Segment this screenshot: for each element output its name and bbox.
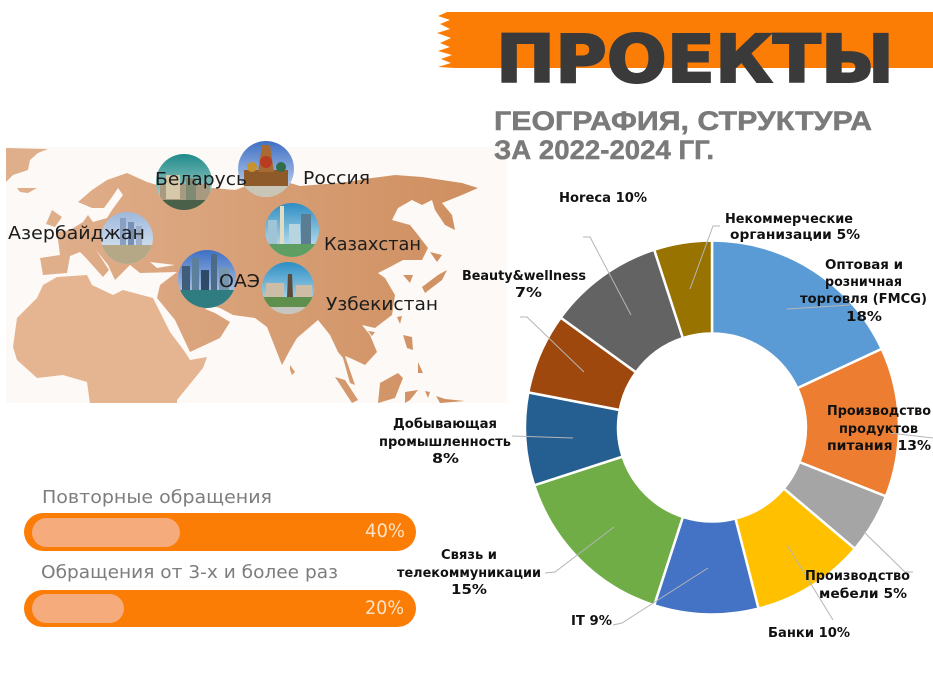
label: Beauty: Beauty&wellness <box>462 269 586 284</box>
segment: telecom 15% <box>534 457 683 605</box>
label: mining: промышленность <box>379 435 511 450</box>
map label: Азербайджан: Азербайджан <box>8 223 145 244</box>
label: banks: Банки 10% <box>768 626 850 641</box>
label: food production: продуктов <box>839 422 918 437</box>
photo: Kazakhstan <box>265 203 319 257</box>
map label: ОАЭ: ОАЭ <box>219 271 260 292</box>
label: food production: питания 13% <box>827 439 931 454</box>
photo: Uzbekistan <box>262 262 314 314</box>
segment: FMCG 18% <box>712 240 882 388</box>
segment: non-profit 5% <box>654 240 712 338</box>
progress bar: 3+ requests 20%: 20% <box>365 597 404 619</box>
label: FMCG: розничная <box>825 275 902 290</box>
label: mining <box>379 417 511 467</box>
photo: Belarus <box>156 154 212 210</box>
segment: furniture 5% <box>784 462 886 549</box>
segment: food production 13% <box>797 349 899 496</box>
segment: horeca 10% <box>561 250 683 372</box>
label: FMCG: торговля (FMCG) <box>800 292 927 307</box>
label: furniture <box>805 569 910 602</box>
label: furniture: мебели 5% <box>819 587 907 602</box>
segment: banks 10% <box>735 489 855 609</box>
progress bar: 3+ requests 20% <box>24 590 416 627</box>
label: mining: 8% <box>432 452 459 467</box>
subtitle <box>494 106 872 165</box>
photo: Azerbaijan <box>101 212 153 264</box>
map of Eurasia and Africa <box>6 147 507 404</box>
photo: Russia <box>238 141 294 197</box>
title: ПРОЕКТЫ <box>496 21 894 98</box>
map label: Узбекистан: Узбекистан <box>326 294 438 315</box>
label: IT: IT 9% <box>571 614 612 629</box>
label: telecom: Связь и <box>441 548 497 563</box>
title band <box>437 12 933 68</box>
label: furniture: Производство <box>805 569 910 584</box>
label: FMCG <box>800 258 927 325</box>
segment: beauty 7% <box>528 318 636 410</box>
map label: Россия: Россия <box>303 168 370 189</box>
label: FMCG: 18% <box>846 310 882 325</box>
leader lines <box>512 226 933 625</box>
label: food production <box>827 404 931 454</box>
label: non-profit: организации 5% <box>730 228 860 243</box>
subtitle: ГЕОГРАФИЯ, СТРУКТУРА <box>494 106 872 136</box>
label: telecom: телекоммуникации <box>397 566 541 581</box>
subtitle: ЗА 2022-2024 ГГ. <box>494 135 714 165</box>
map label: Казахстан: Казахстан <box>324 234 421 255</box>
label: mining: Добывающая <box>393 417 497 432</box>
progress bar: repeat requests 40%: 40% <box>365 520 405 542</box>
label: food production: Производство <box>827 404 931 419</box>
label: repeat requests: Повторные обращения <box>42 488 272 508</box>
label: Beauty <box>462 269 586 301</box>
photo: UAE <box>178 250 236 308</box>
label: Horeca: Horeca 10% <box>559 191 647 206</box>
label: Beauty: 7% <box>515 286 542 301</box>
donut chart <box>525 240 899 614</box>
label: FMCG: Оптовая и <box>825 258 903 273</box>
map label: Беларусь: Беларусь <box>155 169 247 190</box>
segment: IT 9% <box>654 517 758 614</box>
label: telecom: 15% <box>451 583 487 598</box>
label: non-profit: Некоммерческие <box>725 212 853 227</box>
label: telecom <box>397 548 541 598</box>
segment: mining 8% <box>525 392 623 485</box>
progress bar: repeat requests 40% <box>24 513 416 551</box>
label: 3+ requests: Обращения от 3-х и более раз <box>41 563 338 583</box>
label: non-profit <box>725 212 860 243</box>
